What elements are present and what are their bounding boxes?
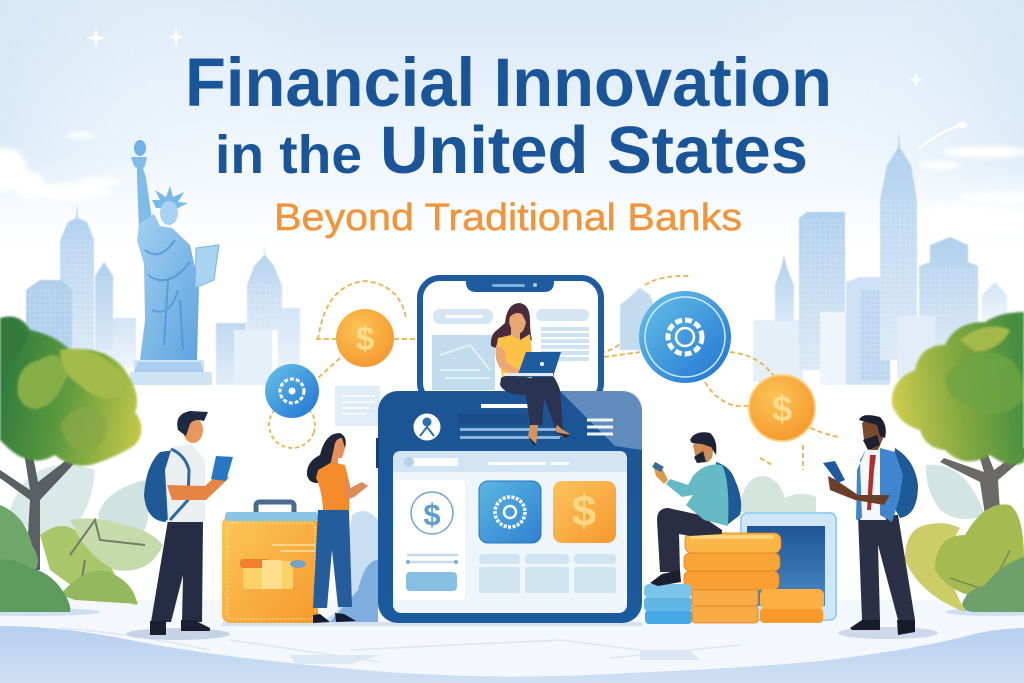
hand with phone (653, 465, 668, 484)
coin: orange dollar right: $ (772, 388, 792, 429)
coin: small blue gear (265, 364, 319, 418)
Statue of Liberty (130, 140, 219, 388)
face and neck (509, 313, 526, 340)
tablet (376, 391, 642, 623)
blue app icon (479, 481, 541, 543)
small document backdrop (335, 386, 380, 426)
trousers (151, 520, 203, 622)
coin: large blue gear (639, 291, 731, 383)
table grid (479, 554, 616, 593)
legs (500, 372, 563, 430)
hair (177, 411, 208, 436)
pale background leaves (926, 465, 985, 519)
shoe (650, 570, 681, 586)
yellow shirt (496, 334, 532, 378)
coin stacks (644, 476, 836, 624)
title line 1: Financial Innovation (185, 44, 832, 121)
title (185, 44, 832, 188)
title line 2: in the (215, 125, 362, 185)
statue pedestal (130, 360, 212, 388)
trousers (858, 515, 915, 620)
forearm (828, 476, 890, 505)
hair and beard (859, 415, 886, 450)
hair (491, 303, 532, 350)
smartphone (420, 277, 601, 403)
woman sitting with laptop (491, 303, 570, 446)
small orange stack (760, 589, 824, 623)
pale bush behind card (740, 476, 816, 512)
white shirt (860, 450, 886, 520)
white shirt (165, 444, 205, 522)
handheld tablet (211, 456, 233, 481)
head (693, 437, 714, 462)
orange suitcase (222, 502, 318, 623)
shoes (150, 620, 210, 635)
orange app icon: $ (572, 487, 596, 536)
left skyline (26, 203, 300, 388)
tablet header lines (458, 404, 560, 439)
man in blue jacket (823, 415, 918, 635)
statue head (160, 201, 178, 225)
dashed connectors (263, 276, 838, 470)
pale background leaves (10, 465, 148, 541)
orange shirt (316, 462, 350, 510)
statue crown (152, 186, 188, 208)
phone chart card (432, 335, 495, 390)
red tie (867, 455, 876, 510)
laptop (517, 352, 561, 377)
blue jacket (856, 448, 903, 522)
orange app icon (553, 481, 616, 543)
large orange stack (684, 533, 781, 623)
hamburger menu (587, 420, 613, 434)
phone search pill left (433, 309, 493, 324)
right tree (892, 312, 1024, 612)
head (183, 417, 203, 443)
subtitle: Beyond Traditional Banks (274, 197, 742, 239)
jeans (313, 510, 352, 608)
bushes (40, 526, 137, 605)
coin: orange dollar left (336, 309, 394, 367)
tablet screen (393, 451, 627, 613)
man sitting on coins (650, 432, 741, 586)
heels (313, 613, 356, 623)
button (406, 572, 457, 591)
phone text block right (536, 309, 589, 359)
blue stack (644, 584, 692, 624)
arm (345, 470, 368, 500)
backdrop foliage (322, 511, 378, 622)
phone notch (466, 277, 554, 292)
head (862, 420, 884, 450)
arm (496, 345, 522, 376)
left panel with dollar ring: $ (423, 497, 441, 532)
blue card behind coins (741, 513, 836, 620)
tree trunk (940, 445, 1024, 515)
teal shirt (666, 464, 728, 526)
tree trunk (0, 440, 85, 570)
right skyline (620, 128, 1007, 390)
profile icon (414, 414, 440, 440)
feet (528, 425, 570, 444)
bushes (905, 523, 965, 612)
clouds and stars (0, 27, 1024, 238)
backpack (890, 448, 918, 518)
coin: orange dollar left: $ (356, 320, 374, 357)
title line 2: United States (380, 113, 808, 188)
left panel with dollar ring (394, 480, 465, 600)
man with tablet and backpack (144, 411, 233, 635)
ground (0, 385, 1024, 683)
statue tablet (195, 245, 219, 288)
tree canopy (0, 316, 142, 466)
coin: orange dollar right (749, 375, 815, 441)
trousers (657, 508, 722, 572)
left tree (0, 316, 163, 612)
backpack (144, 448, 188, 522)
woman in orange standing (307, 433, 378, 623)
tree canopy (892, 312, 1024, 465)
backpack (716, 462, 741, 525)
face (330, 438, 345, 466)
torch and raised arm (131, 157, 153, 230)
hair (307, 433, 346, 483)
arm (167, 470, 229, 500)
shoes (850, 620, 915, 635)
hair and beard (690, 432, 716, 463)
handheld tablet (823, 461, 845, 483)
statue robe (137, 214, 199, 360)
